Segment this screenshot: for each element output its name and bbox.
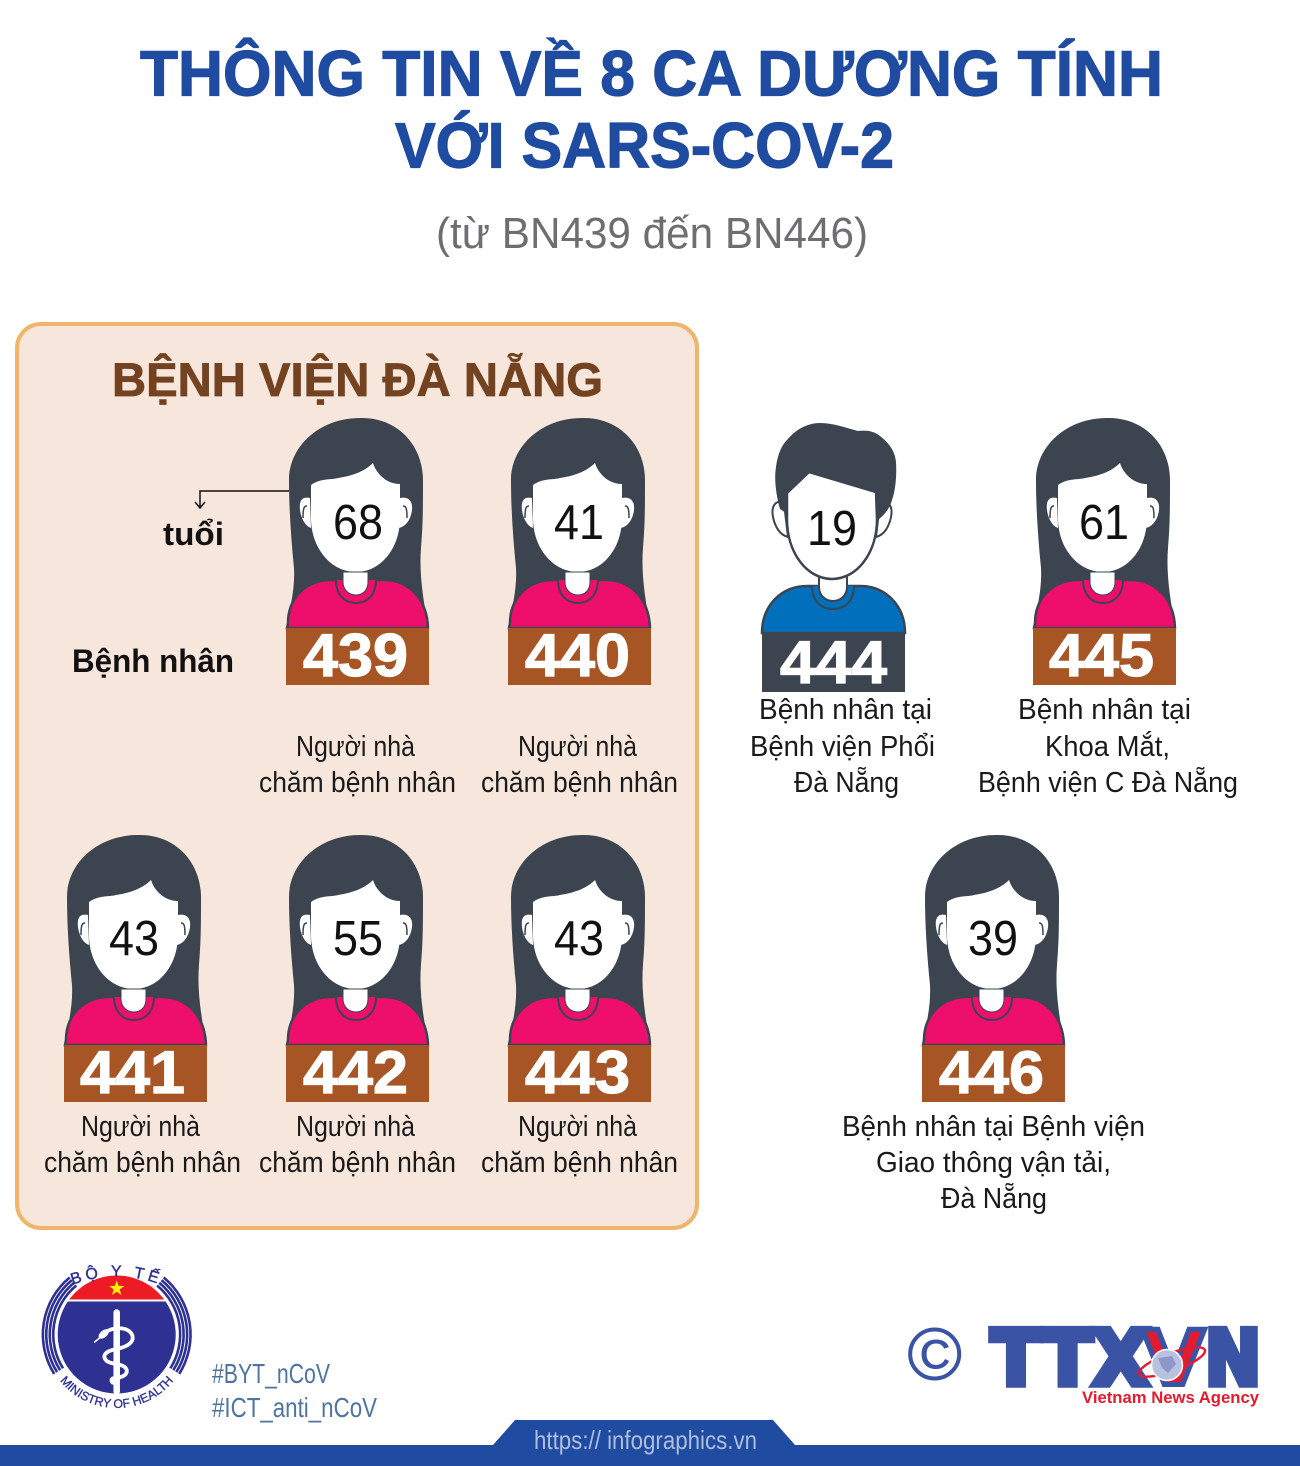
patient 444: Bệnh nhân tại	[759, 694, 932, 726]
patient 445: 445	[1049, 622, 1154, 689]
patient 442: chăm bệnh nhân	[259, 1147, 456, 1179]
logo: TTXVN: V	[1142, 1314, 1205, 1403]
panel background	[17, 324, 697, 1228]
footer url: https:// infographics.vn	[534, 1425, 757, 1455]
patient 446: 446	[939, 1039, 1044, 1106]
age label with arrow: tuổi	[163, 516, 224, 552]
patient 446: Đà Nẵng	[941, 1182, 1047, 1215]
patient 439: 68	[333, 496, 383, 550]
patient 442: Người nhà	[296, 1111, 416, 1143]
copyright icon	[910, 1330, 959, 1378]
title: THÔNG TIN VỀ 8 CA DƯƠNG TÍNH	[140, 36, 1163, 110]
patient 443	[481, 835, 678, 1179]
panel: Bệnh viện Đà Nẵng	[17, 324, 697, 1228]
patient 446: Bệnh nhân tại Bệnh viện	[842, 1111, 1145, 1143]
patient 444: Bệnh viện Phổi	[750, 731, 935, 763]
hashtags: #BYT_nCoV	[212, 1358, 330, 1389]
patient 446: 39	[968, 912, 1018, 966]
logo text bottom: MINISTRY OF HEALTH	[60, 1376, 174, 1408]
logo text top: BỘ Y TẾ	[70, 1264, 161, 1284]
patient 443: 443	[525, 1039, 630, 1106]
logo tagline: Vietnam News Agency	[1082, 1389, 1260, 1407]
logo staff and snake	[95, 1312, 133, 1392]
patient 445: 61	[1079, 496, 1129, 550]
patient 441	[44, 835, 241, 1179]
patient 441: chăm bệnh nhân	[44, 1147, 241, 1179]
logo side arcs	[43, 1278, 191, 1374]
logo globe	[1136, 1342, 1208, 1382]
patient 445	[978, 418, 1238, 799]
patient 440: 440	[525, 622, 630, 689]
title: VỚI SARS-COV-2	[395, 110, 894, 182]
patient 444: 19	[807, 502, 857, 556]
patient 441: 43	[109, 912, 159, 966]
patient 445: Bệnh viện C Đà Nẵng	[978, 766, 1238, 799]
copyright icon: C	[920, 1333, 950, 1377]
patient 444: 444	[780, 629, 888, 696]
patient 442: 55	[333, 912, 383, 966]
patient 440: 41	[554, 496, 604, 550]
patient 439: Người nhà	[296, 731, 416, 763]
logo: TTXVN	[991, 1314, 1261, 1407]
patient 439	[259, 418, 456, 799]
footer tab	[493, 1420, 795, 1445]
patient label: Bệnh nhân	[72, 643, 234, 679]
patient 441: 441	[80, 1039, 185, 1106]
logo: Ministry of Health	[42, 1264, 192, 1408]
hashtags: #ICT_anti_nCoV	[212, 1392, 377, 1423]
hashtags	[212, 1358, 377, 1423]
logo star	[109, 1280, 124, 1295]
patient 439: chăm bệnh nhân	[259, 767, 456, 799]
patient 443: Người nhà	[518, 1111, 638, 1143]
patient 444	[750, 423, 935, 799]
patient 443: 43	[554, 912, 604, 966]
patient 440: chăm bệnh nhân	[481, 767, 678, 799]
logo red segment	[69, 1275, 164, 1300]
logo: TTXVN: N	[1205, 1314, 1261, 1403]
logo letters: TTX	[991, 1314, 1149, 1403]
patient 445: Khoa Mắt,	[1045, 730, 1170, 763]
patient 440	[481, 418, 678, 799]
patient 445: Bệnh nhân tại	[1018, 694, 1191, 726]
patient 441: Người nhà	[81, 1111, 201, 1143]
logo blue segment	[58, 1302, 176, 1394]
patient 446	[842, 835, 1145, 1215]
patient 439: 439	[303, 622, 408, 689]
patient 444: Đà Nẵng	[794, 766, 899, 799]
patient 442: 442	[303, 1039, 408, 1106]
patient 443: chăm bệnh nhân	[481, 1147, 678, 1179]
title	[140, 36, 1163, 182]
panel heading: BỆNH VIỆN ĐÀ NẴNG	[112, 353, 603, 406]
age label with arrow	[163, 491, 289, 552]
subtitle: (từ BN439 đến BN446)	[436, 209, 868, 258]
patient 440: Người nhà	[518, 731, 638, 763]
footer bar	[0, 1420, 1300, 1466]
patient 442	[259, 835, 456, 1179]
patient 446: Giao thông vận tải,	[876, 1147, 1111, 1179]
